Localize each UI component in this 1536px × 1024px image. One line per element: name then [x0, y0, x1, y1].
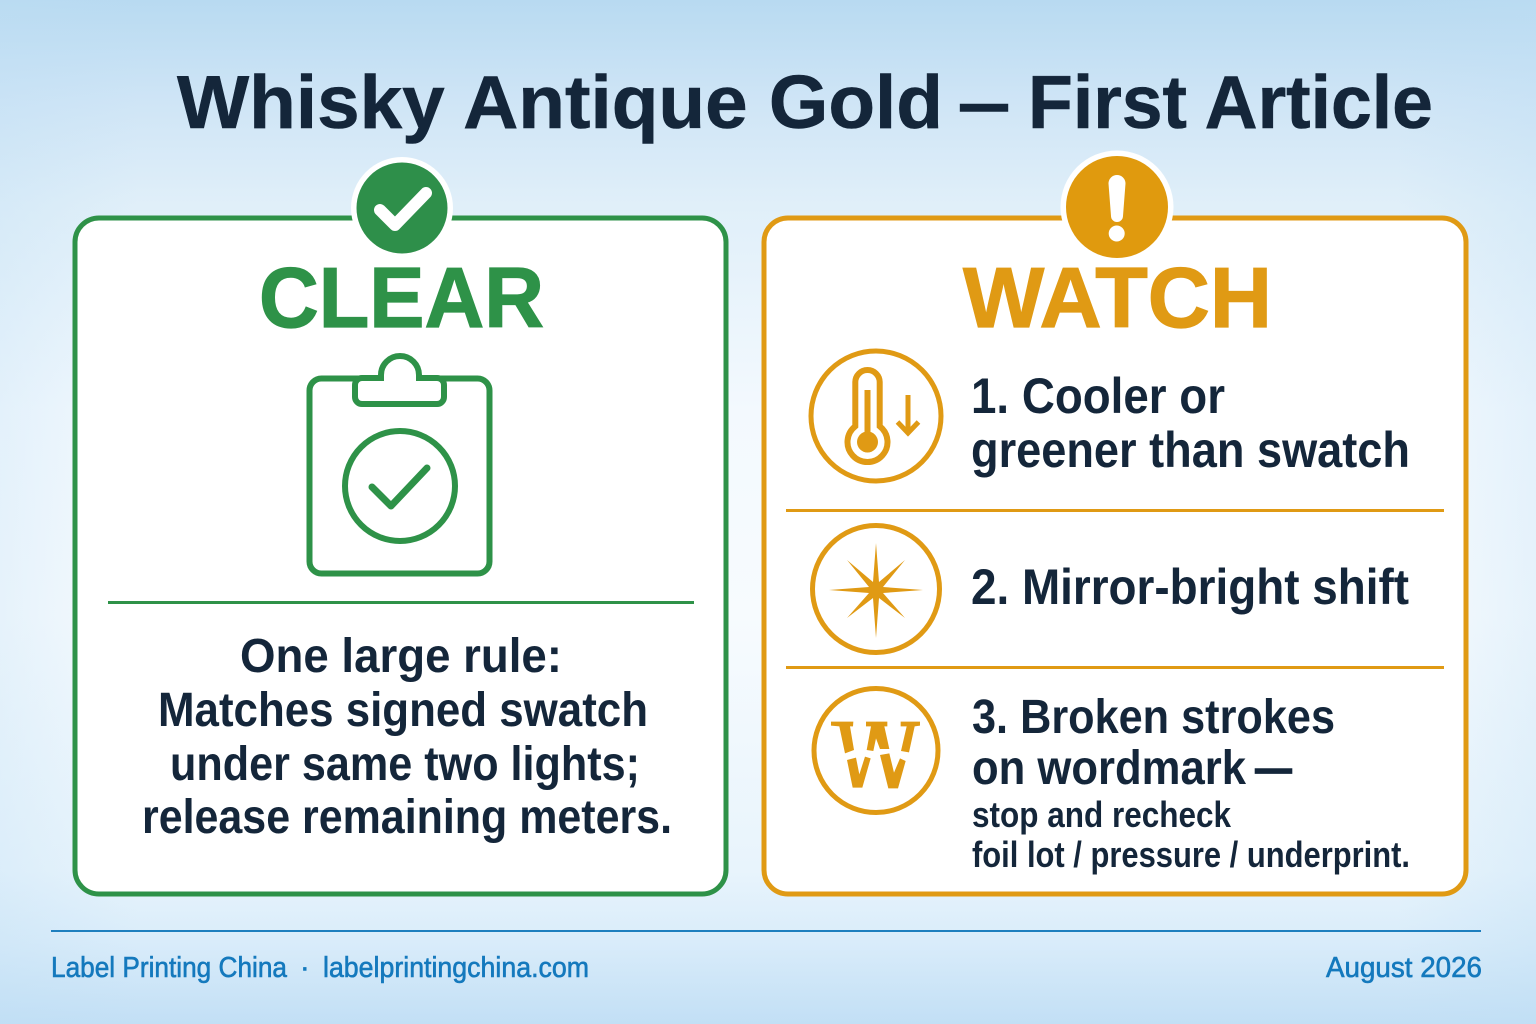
text: item 3 [972, 691, 1410, 875]
title: First Article [1028, 60, 1433, 144]
icon: thermometer [811, 351, 941, 481]
footer: source: labelprintingchina.com [323, 952, 589, 984]
text: item 3: 3. Broken strokes [972, 691, 1335, 744]
text: item 2: 2. Mirror-bright shift [971, 559, 1409, 615]
footer: date: August 2026 [1326, 952, 1482, 984]
divider: clear [108, 601, 694, 604]
text: item 3: on wordmark [972, 742, 1246, 795]
icon: watch badge [1060, 150, 1174, 264]
text: clear rule: One large rule: [240, 630, 562, 683]
text: item 1 [971, 368, 1410, 478]
heading: watch: WATCH [963, 251, 1272, 346]
title: — [960, 60, 1008, 144]
heading: clear: CLEAR [259, 251, 544, 346]
footer: source: Label Printing China [51, 952, 288, 984]
icon: broken W [814, 688, 938, 812]
icon: sparkle [812, 526, 940, 652]
divider: watch 1 [786, 509, 1444, 512]
divider: watch 2 [786, 666, 1444, 669]
footer: source: · [300, 952, 310, 984]
text: clear rule: under same two lights; [170, 738, 640, 791]
panel: watch [764, 150, 1466, 894]
title [177, 60, 1433, 144]
text: clear rule: release remaining meters. [142, 791, 672, 844]
title: Whisky Antique Gold [177, 60, 943, 144]
panel: clear [75, 157, 726, 894]
text: item 1: greener than swatch [971, 422, 1410, 478]
icon: clear badge [351, 157, 453, 259]
text: item 1: 1. Cooler or [971, 368, 1225, 424]
footer rule [51, 930, 1481, 932]
text: item 3: foil lot / pressure / underprint. [972, 834, 1410, 875]
icon: clipboard with check [310, 356, 490, 574]
text: item 3: — [1255, 742, 1292, 795]
footer: source [51, 952, 589, 984]
text: clear rule [142, 630, 672, 844]
text: item 3: stop and recheck [972, 794, 1232, 835]
text: clear rule: Matches signed swatch [158, 684, 648, 737]
